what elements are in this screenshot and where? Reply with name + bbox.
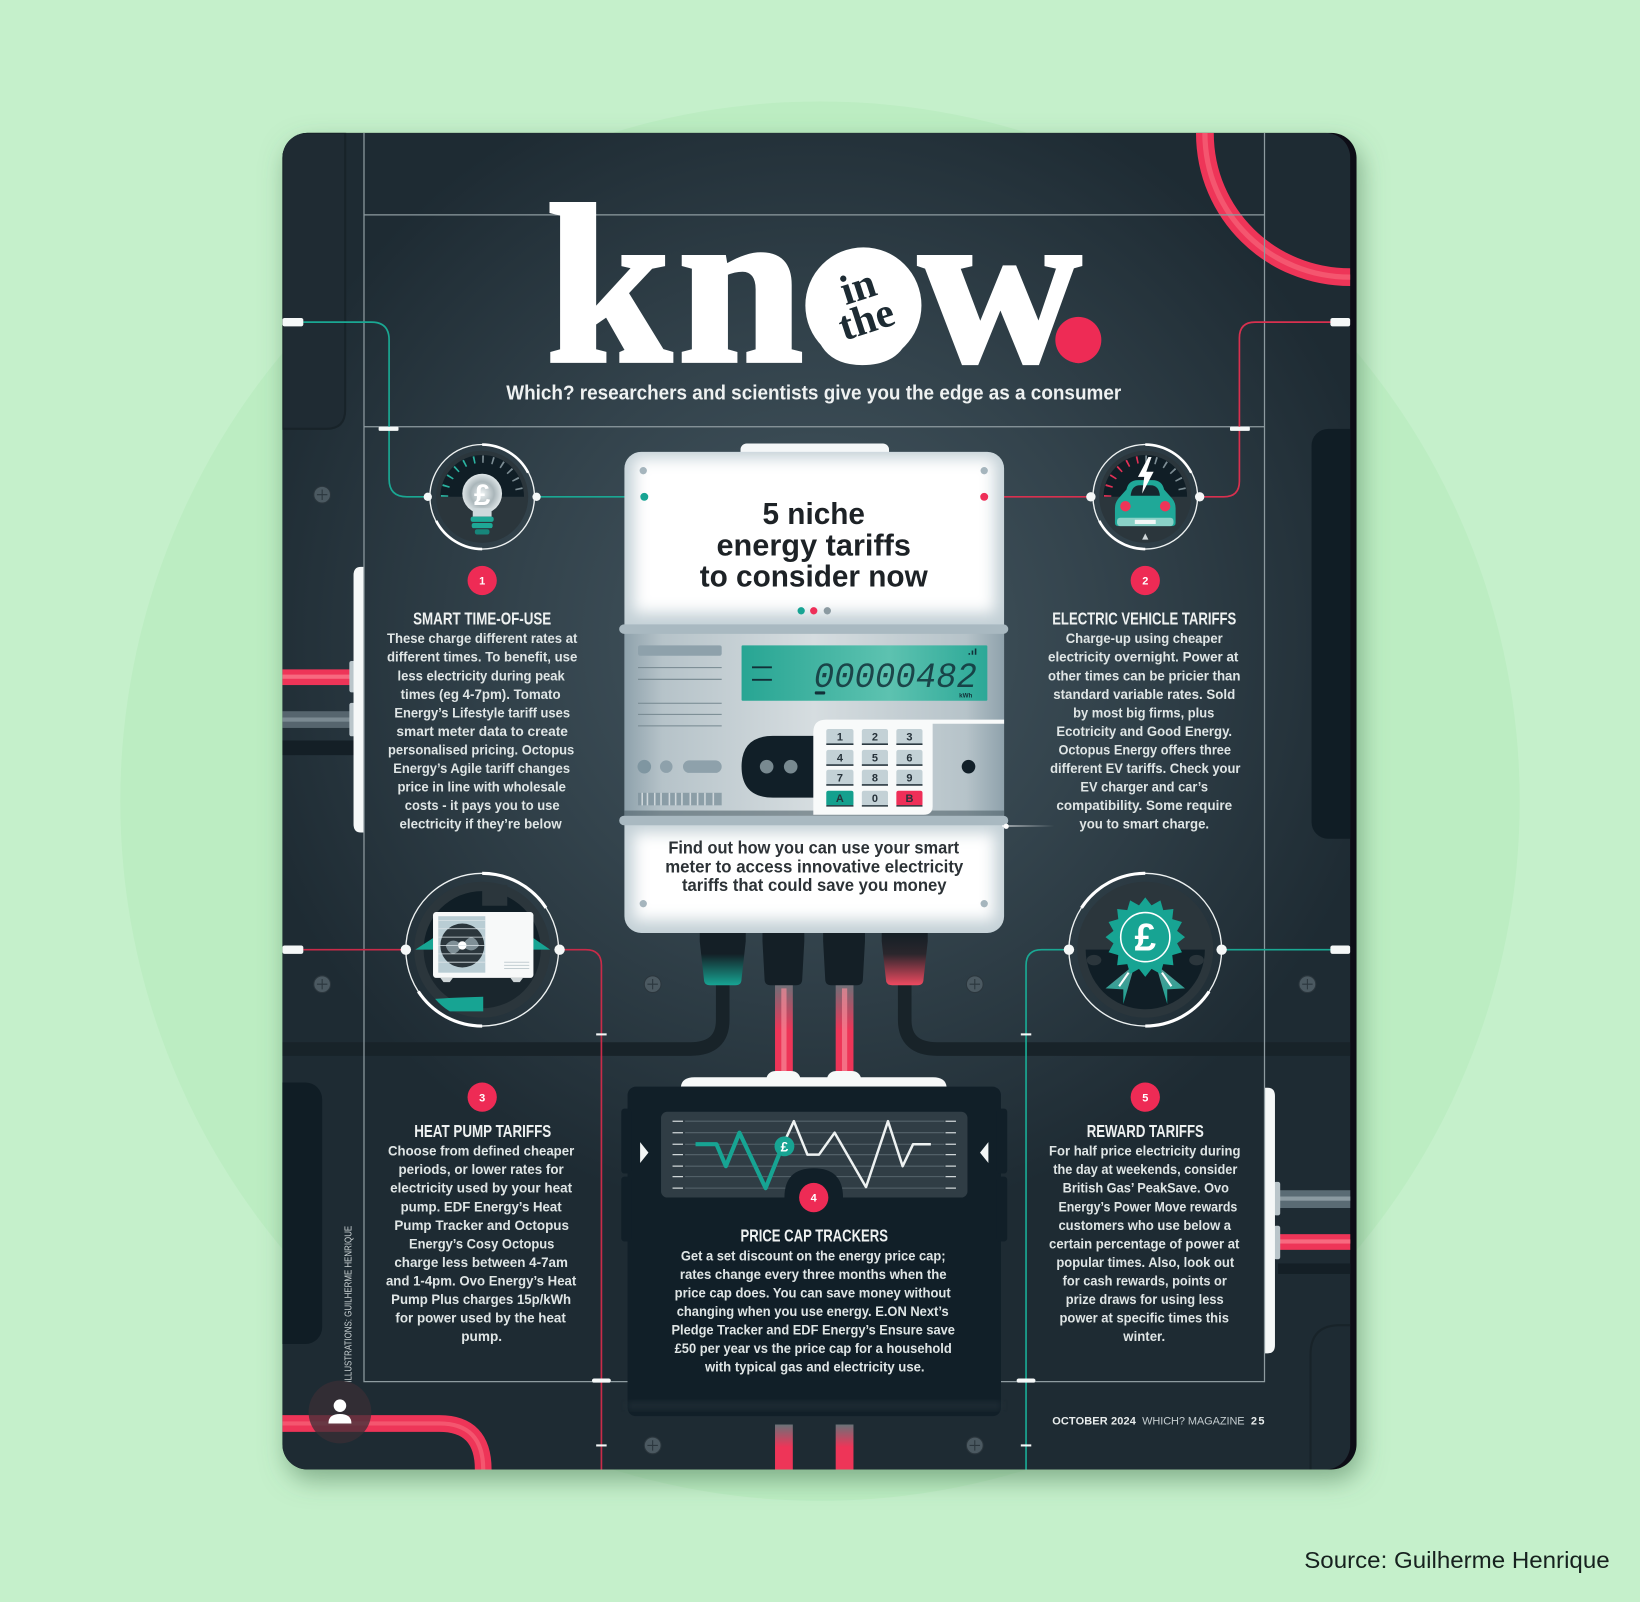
magazine footer bbox=[1052, 1416, 1265, 1428]
panel: heat pump tariffs: Choose from defined cheaper bbox=[388, 1144, 575, 1160]
panel: smart time-of-use bbox=[387, 608, 578, 832]
panel: reward tariffs: the day at weekends, consider bbox=[1053, 1162, 1238, 1178]
panel: smart time-of-use: Energy’s Agile tariff changes bbox=[393, 761, 570, 777]
meter keypad: 1 bbox=[837, 731, 843, 743]
panel: smart time-of-use: less electricity during peak bbox=[397, 668, 565, 684]
status dots bbox=[798, 607, 831, 614]
right bracket with pipes bbox=[1265, 1088, 1351, 1353]
panel: electric vehicle tariffs bbox=[1048, 608, 1241, 832]
panel: smart time-of-use: price in line with wholesale bbox=[397, 779, 566, 795]
meter keypad: 4 bbox=[837, 752, 844, 764]
meter LCD display: 00000482 bbox=[814, 657, 977, 698]
number badges bbox=[468, 566, 1160, 1212]
meter keypad: 2 bbox=[872, 731, 878, 743]
icon: profile avatar bbox=[309, 1381, 371, 1443]
meter keypad bbox=[813, 720, 1004, 815]
meter heading bbox=[700, 502, 928, 587]
background circle bbox=[120, 101, 1520, 1501]
panel: price cap trackers: PRICE CAP TRACKERS bbox=[741, 1225, 888, 1245]
panel: electric vehicle tariffs: compatibility. Some require bbox=[1056, 798, 1232, 814]
panel: smart time-of-use: Energy’s Lifestyle tariff uses bbox=[394, 705, 570, 721]
price chart: £ bbox=[781, 1140, 789, 1155]
panel: reward tariffs: Energy’s Power Move rewards bbox=[1058, 1199, 1237, 1215]
panel: heat pump tariffs: periods, or lower rates for bbox=[399, 1162, 564, 1178]
meter keypad: 8 bbox=[872, 772, 878, 784]
panel: heat pump tariffs: charge less between 4-7am bbox=[394, 1255, 568, 1271]
number badges: 4 bbox=[811, 1193, 818, 1205]
number badges: 3 bbox=[479, 1092, 485, 1104]
panel: electric vehicle tariffs: ELECTRIC VEHICLE TARIFFS bbox=[1052, 608, 1236, 628]
magazine footer: OCTOBER 2024 bbox=[1052, 1416, 1137, 1428]
meter description bbox=[665, 837, 964, 895]
panel: smart time-of-use: SMART TIME-OF-USE bbox=[413, 608, 551, 628]
meter cables and terminals bbox=[700, 933, 928, 1077]
panel: smart time-of-use: times (eg 4-7pm). Tomato bbox=[401, 687, 561, 703]
panel: electric vehicle tariffs: Octopus Energy offers three bbox=[1058, 742, 1231, 758]
title: in the know: in bbox=[834, 260, 882, 315]
panel: reward tariffs: winter. bbox=[1122, 1329, 1165, 1345]
meter label lines bbox=[637, 645, 722, 805]
panel: heat pump tariffs: HEAT PUMP TARIFFS bbox=[414, 1121, 551, 1141]
meter keypad: B bbox=[905, 793, 913, 805]
panel: electric vehicle tariffs: Ecotricity and Good Energy. bbox=[1056, 724, 1232, 740]
panel: smart time-of-use: These charge different rates at bbox=[387, 631, 578, 647]
title: in the know: k bbox=[546, 160, 672, 410]
panel: electric vehicle tariffs: you to smart charge. bbox=[1079, 816, 1209, 832]
panel: electric vehicle tariffs: other times can be pricier than bbox=[1048, 668, 1240, 684]
source credit: Source: Guilherme Henrique bbox=[1304, 1547, 1610, 1573]
connector wires bbox=[303, 322, 1340, 1469]
background panels and cables bbox=[251, 133, 1385, 1469]
panel: smart time-of-use: smart meter data to create bbox=[396, 724, 568, 740]
title: in the know: the bbox=[833, 289, 900, 350]
screws bbox=[314, 486, 1316, 1454]
meter LCD display bbox=[742, 645, 987, 701]
meter description: Find out how you can use your smart bbox=[668, 837, 959, 857]
white mounting strip bbox=[681, 1071, 947, 1087]
meter dark port bbox=[742, 736, 814, 798]
magazine footer: 25 bbox=[1251, 1416, 1265, 1428]
panel: heat pump tariffs: and 1-4pm. Ovo Energy’s Heat bbox=[386, 1273, 577, 1289]
panel: electric vehicle tariffs: electricity overnight. Power at bbox=[1048, 650, 1239, 666]
meter keypad: A bbox=[836, 793, 844, 805]
meter screws bbox=[640, 467, 988, 907]
icon: smart time-of-use light bulb gauge: £ bbox=[474, 479, 490, 512]
meter keypad: 3 bbox=[906, 731, 912, 743]
panel: smart time-of-use: different times. To benefit, use bbox=[387, 650, 577, 666]
meter description: meter to access innovative electricity bbox=[665, 856, 964, 876]
number badges: 5 bbox=[1142, 1092, 1148, 1104]
panel: reward tariffs: prize draws for using less bbox=[1066, 1292, 1224, 1308]
panel: reward tariffs: for cash rewards, points or bbox=[1063, 1273, 1227, 1289]
panel: heat pump tariffs: pump. bbox=[461, 1329, 502, 1345]
meter keypad: 5 bbox=[872, 752, 878, 764]
lower cables bbox=[775, 1425, 853, 1469]
panel: reward tariffs bbox=[1049, 1121, 1240, 1345]
meter lower white casing bbox=[634, 833, 995, 920]
panel 4 black box bbox=[621, 1087, 1007, 1416]
icon: reward rosette: £ bbox=[1135, 917, 1157, 960]
meter heading: 5 niche bbox=[762, 498, 865, 531]
meter keypad: 9 bbox=[906, 772, 912, 784]
panel: smart time-of-use: costs - it pays you to use bbox=[405, 798, 560, 814]
illustration credit: ILLUSTRATIONS: GUILHERME HENRIQUE bbox=[343, 1226, 354, 1383]
smart meter bbox=[619, 443, 1054, 933]
panel: heat pump tariffs bbox=[386, 1121, 577, 1345]
title: in the know: n bbox=[678, 160, 803, 410]
panel: heat pump tariffs: Energy’s Cosy Octopus bbox=[409, 1236, 554, 1252]
panel: heat pump tariffs: Pump Tracker and Octopus bbox=[394, 1218, 569, 1234]
meter heading: to consider now bbox=[700, 561, 928, 594]
icon: electric vehicle gauge bbox=[1086, 445, 1204, 549]
icon: reward rosette bbox=[1064, 873, 1227, 1026]
panel: heat pump tariffs: Pump Plus charges 15p/kWh bbox=[391, 1292, 571, 1308]
panel: reward tariffs: For half price electricity during bbox=[1049, 1144, 1240, 1160]
panel: heat pump tariffs: electricity used by your heat bbox=[390, 1181, 572, 1197]
magazine page card bbox=[251, 133, 1385, 1469]
icon: smart time-of-use light bulb gauge bbox=[424, 445, 541, 549]
left bracket with pipes bbox=[282, 567, 364, 833]
title: in the know: o bbox=[806, 160, 919, 410]
title: in the know: w bbox=[918, 160, 1081, 410]
panel: electric vehicle tariffs: Charge-up using cheaper bbox=[1066, 631, 1223, 647]
meter connector dots bbox=[640, 493, 988, 501]
panel: electric vehicle tariffs: by most big firms, plus bbox=[1073, 705, 1214, 721]
panel: reward tariffs: British Gas’ PeakSave. Ovo bbox=[1063, 1181, 1229, 1197]
panel: smart time-of-use: personalised pricing. Octopus bbox=[388, 742, 574, 758]
panel: heat pump tariffs: for power used by the heat bbox=[395, 1310, 566, 1326]
number badges: 1 bbox=[479, 576, 485, 588]
meter description: tariffs that could save you money bbox=[682, 875, 947, 895]
panel: reward tariffs: certain percentage of power at bbox=[1049, 1236, 1240, 1252]
title: in the know bbox=[550, 202, 1102, 366]
frame lines bbox=[364, 133, 1265, 1382]
meter keypad: 6 bbox=[906, 752, 912, 764]
panel: price cap trackers: Get a set discount on the energy price cap; bbox=[681, 1248, 946, 1264]
icon: heat pump bbox=[401, 873, 565, 1026]
title: in the know: . bbox=[1057, 213, 1099, 398]
magazine footer: WHICH? MAGAZINE bbox=[1142, 1416, 1245, 1428]
meter heading: energy tariffs bbox=[716, 529, 911, 562]
top right red pipe bbox=[1205, 133, 1350, 277]
meter flare bbox=[1002, 824, 1054, 829]
panel: reward tariffs: REWARD TARIFFS bbox=[1087, 1121, 1204, 1141]
panel: electric vehicle tariffs: different EV tariffs. Check your bbox=[1050, 761, 1241, 777]
panel: price cap trackers: Pledge Tracker and EDF Energy’s Ensure save bbox=[671, 1322, 955, 1338]
meter upper white casing bbox=[634, 458, 995, 613]
meter keypad: 0 bbox=[872, 793, 878, 805]
panel: reward tariffs: power at specific times this bbox=[1060, 1310, 1229, 1326]
panel: price cap trackers: with typical gas and electricity use. bbox=[704, 1359, 925, 1375]
meter LCD display: kWh bbox=[959, 693, 973, 700]
number badges: 2 bbox=[1142, 576, 1148, 588]
meter keypad: 7 bbox=[837, 772, 843, 784]
panel: electric vehicle tariffs: EV charger and car’s bbox=[1080, 779, 1208, 795]
panel: price cap trackers: £50 per year vs the price cap for a household bbox=[675, 1341, 952, 1357]
bottom left red pipe bbox=[282, 1423, 483, 1469]
price chart bbox=[661, 1112, 967, 1198]
panel: price cap trackers: changing when you use energy. E.ON Next’s bbox=[677, 1304, 949, 1320]
wire end tabs bbox=[282, 318, 1350, 1446]
panel: price cap trackers bbox=[671, 1225, 955, 1375]
panel: reward tariffs: popular times. Also, look out bbox=[1056, 1255, 1234, 1271]
panel: heat pump tariffs: pump. EDF Energy’s Heat bbox=[401, 1199, 562, 1215]
panel: electric vehicle tariffs: standard variable rates. Sold bbox=[1053, 687, 1235, 703]
panel: reward tariffs: customers who use below a bbox=[1058, 1218, 1231, 1234]
subtitle: Which? researchers and scientists give you the edge as a consumer bbox=[506, 383, 1121, 405]
panel: price cap trackers: price cap does. You can save money without bbox=[675, 1285, 951, 1301]
panel: price cap trackers: rates change every three months when the bbox=[680, 1267, 947, 1283]
panel: smart time-of-use: electricity if they’re below bbox=[400, 816, 563, 832]
